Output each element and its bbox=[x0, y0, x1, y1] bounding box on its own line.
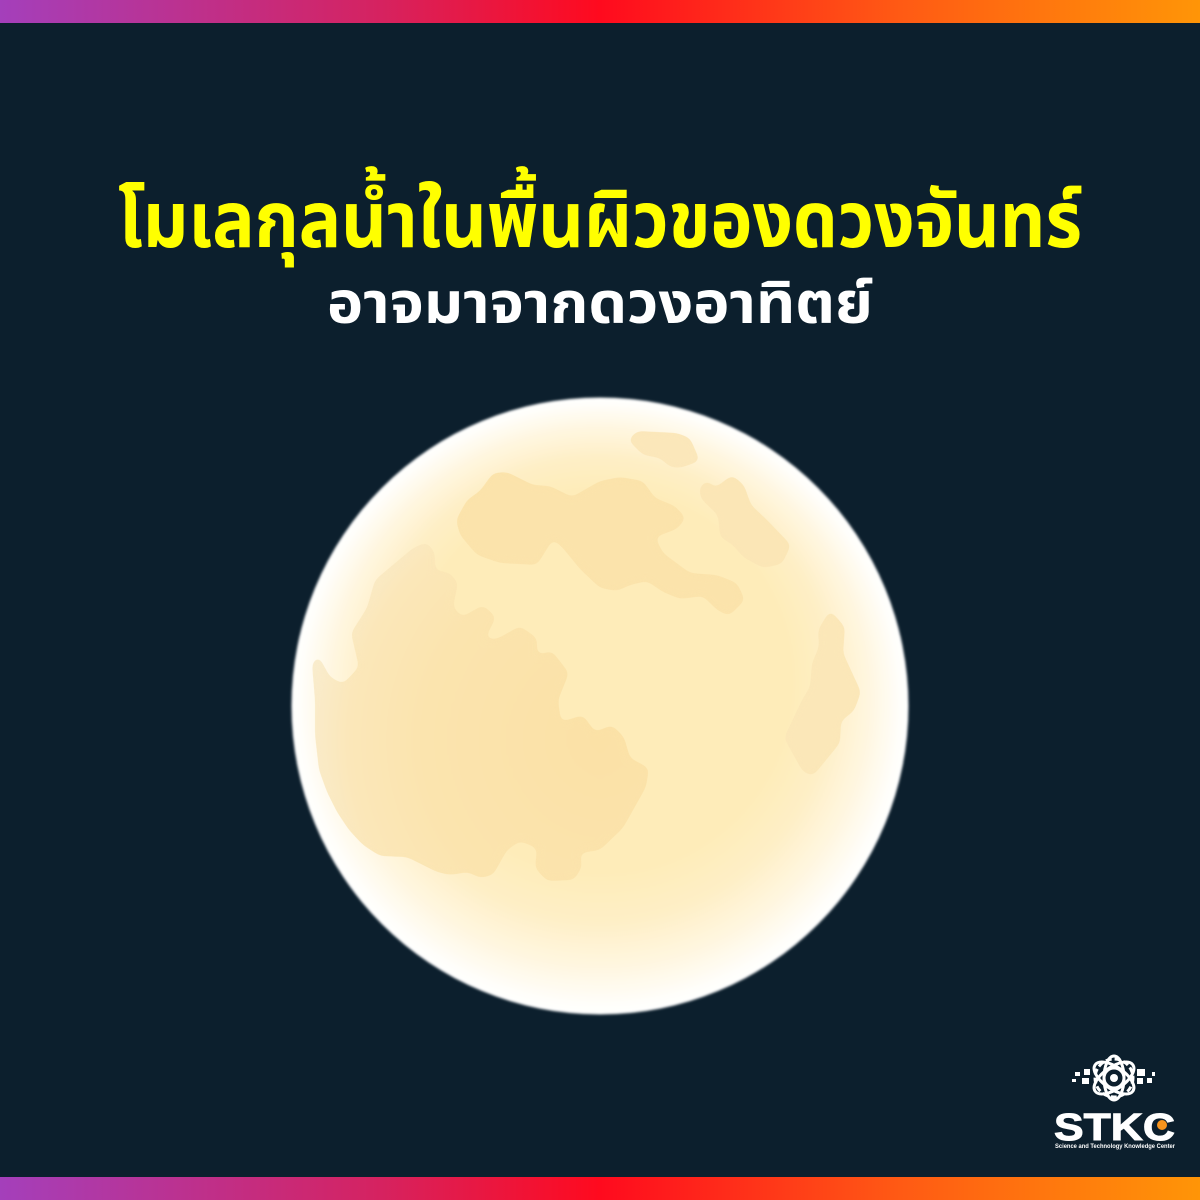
bottom gradient bar bbox=[0, 1177, 1200, 1200]
logo wordmark: STKC bbox=[1054, 1107, 1175, 1149]
title: โมเลกุลน้ำในพื้นผิวของดวงจันทร์ bbox=[118, 166, 1082, 267]
logo atom icon bbox=[1089, 1056, 1139, 1100]
top gradient bar bbox=[0, 0, 1200, 23]
moon maria patches bbox=[312, 431, 861, 881]
logo side squares bbox=[1072, 1069, 1155, 1084]
logo tagline: Science and Technology Knowledge Center bbox=[1055, 1143, 1175, 1150]
moon disc bbox=[292, 398, 908, 1014]
subtitle: อาจมาจากดวงอาทิตย์ bbox=[327, 271, 873, 336]
logo: STKC bbox=[1054, 1056, 1175, 1150]
logo orange dot bbox=[1157, 1120, 1167, 1130]
illustration: full moon bbox=[292, 398, 908, 1014]
